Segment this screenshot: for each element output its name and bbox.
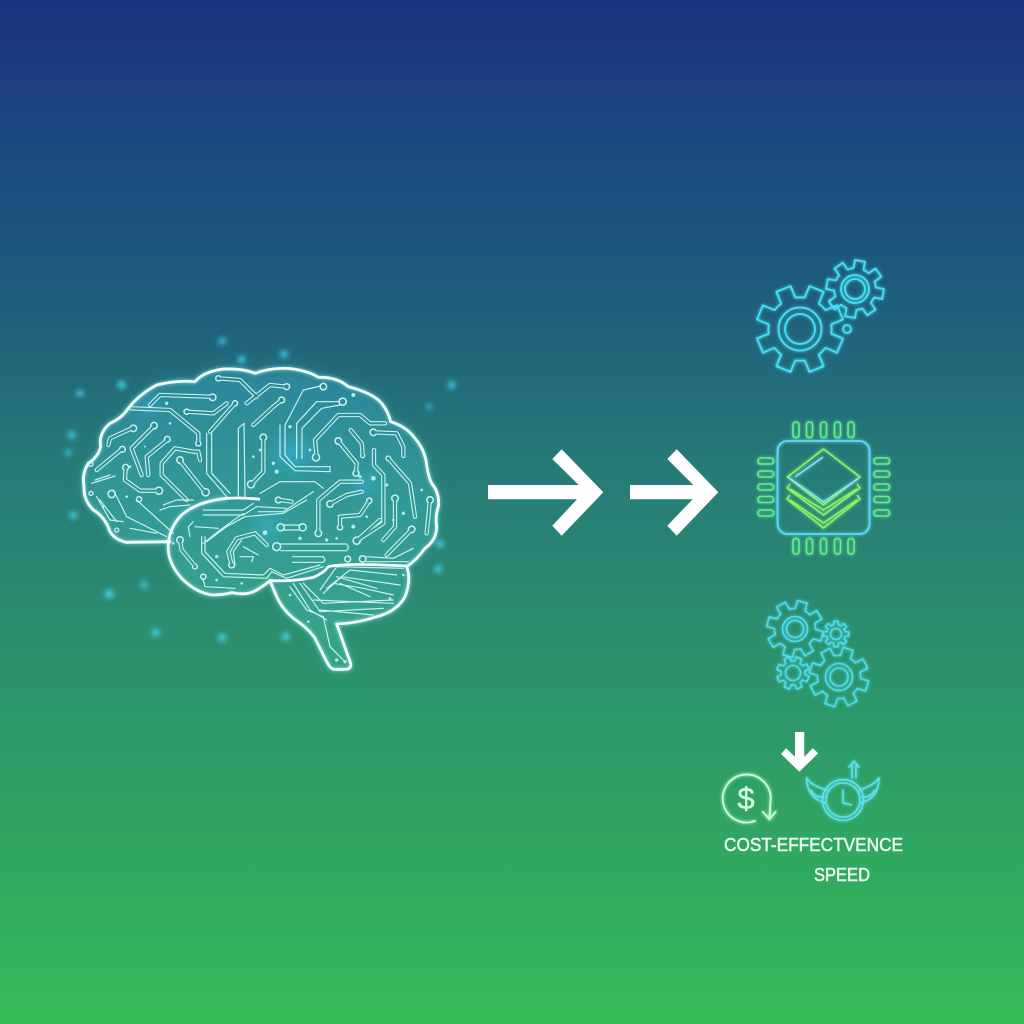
label: speed: SPEED [814,865,870,885]
small data dots [102,393,423,663]
icon: processor chip with layers [758,422,890,554]
brain outline [83,368,439,669]
single circuit traces [92,386,413,660]
floating particles [65,338,455,642]
layer highlight [788,457,859,502]
icon: dollar cost reduction [723,774,776,822]
brain illustration [60,338,460,680]
double circuit traces [88,375,434,580]
dollar sign: $ [737,781,755,816]
icon: four gears cluster [761,595,876,714]
icon: two gears [743,256,888,386]
brain halo glow [83,368,439,669]
brain fill [83,368,439,669]
label: cost-effectiveness: COST-EFFECTVENCE [724,835,903,855]
arrow: down arrow [781,732,818,772]
arrow: first right arrow [488,449,603,536]
icon: winged clock [806,761,879,820]
chip body [778,441,870,534]
arrow: second right arrow [630,449,718,536]
stacked layers [787,449,860,528]
chip pins [758,422,890,554]
brain outline glow [83,368,439,669]
inner highlight spots [137,393,378,540]
